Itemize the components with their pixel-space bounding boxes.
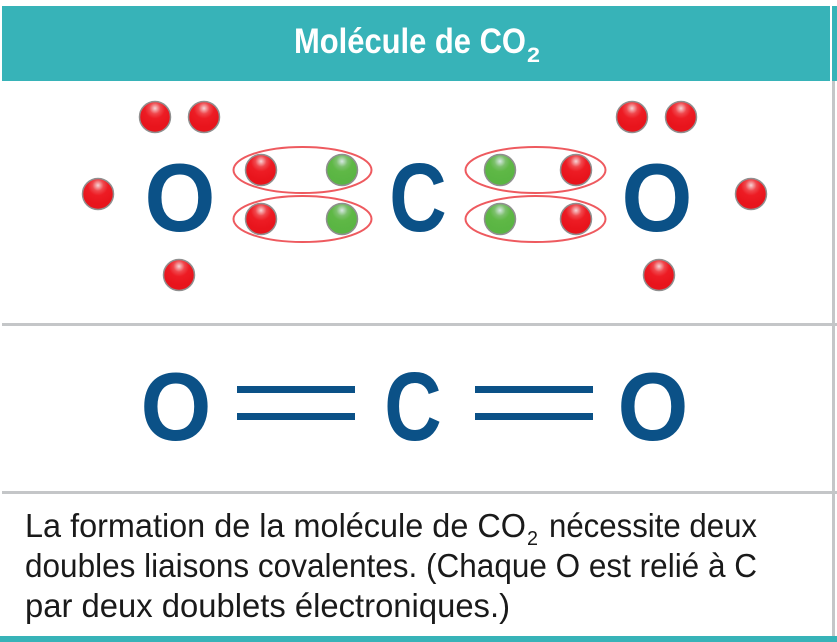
panel: structural formula	[141, 352, 688, 461]
left shared electron pairs	[234, 147, 372, 242]
caption text: par deux doublets électroniques.)	[25, 587, 510, 624]
right oxygen symbol: O	[622, 143, 692, 252]
caption text: nécessite deux	[549, 507, 757, 544]
left double bond	[237, 386, 355, 420]
right oxygen lone electrons	[616, 102, 766, 290]
header banner: 2	[527, 44, 540, 67]
panel: Lewis electron diagram	[82, 102, 766, 290]
caption text: La formation de la molécule de CO	[25, 507, 526, 544]
footer teal bar	[0, 636, 837, 642]
header banner	[2, 6, 837, 81]
left oxygen symbol: O	[145, 143, 215, 252]
left oxygen symbol: O	[141, 352, 211, 461]
carbon symbol: C	[384, 353, 442, 461]
heading: Molécule de CO	[294, 22, 526, 61]
caption text: doubles liaisons covalentes. (Chaque O est relié à C	[25, 547, 757, 584]
left oxygen lone electrons	[82, 102, 220, 290]
caption text	[25, 507, 757, 624]
right double bond	[475, 386, 593, 420]
caption text: 2	[527, 528, 538, 550]
right shared electron pairs	[466, 147, 606, 242]
right oxygen symbol: O	[618, 352, 688, 461]
carbon symbol: C	[389, 144, 447, 252]
